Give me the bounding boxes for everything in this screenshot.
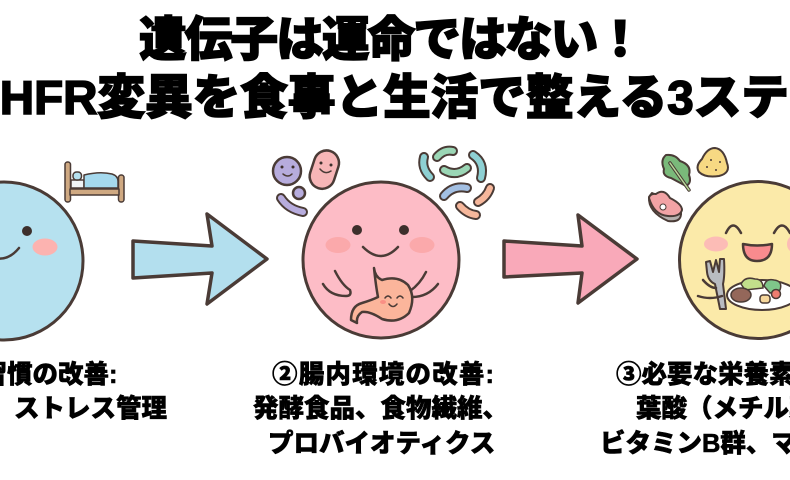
title [0,14,790,125]
text: step 2 caption: 発酵食品、食物繊維、 [253,395,508,423]
title: 遺伝子は運命ではない！ [139,14,644,67]
icon: potato [698,148,728,176]
icon: plate of food [727,278,790,310]
arrow: blue [133,214,267,304]
icon: smiling stomach [351,268,412,323]
icon: leafy greens [662,155,690,190]
icon: yellow face [680,182,790,338]
icon: bed [65,162,124,202]
text: step 2 caption [253,361,508,458]
icon: coloured bacteria [423,151,490,215]
text: step 2 caption: プロバイオティクス [268,430,495,458]
icon: fork [698,259,726,309]
panel: step 2 gut environment [273,147,490,338]
icon: pink face [303,182,459,338]
icon: purple microbes [273,157,305,212]
text: step 1 caption [0,361,167,423]
panel: step 3 nutrients [649,148,790,338]
text: step 2 caption: ②腸内環境の改善: [272,361,494,389]
panel: step 1 sleep and stress [0,162,124,340]
icon: meat [649,192,682,221]
text: step 1 caption: ストレス管理 [14,394,167,423]
icon: pink microbe [306,147,342,192]
text: step 3 caption [600,361,790,458]
icon: blue face [0,182,83,340]
arrow: pink [504,215,637,303]
